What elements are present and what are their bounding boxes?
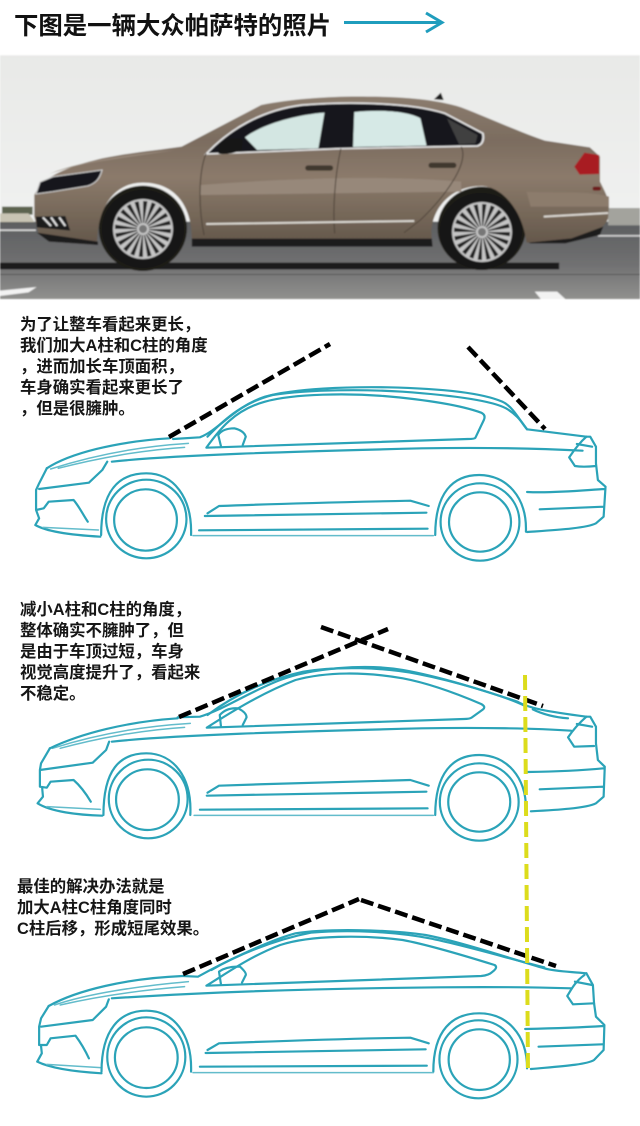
underbody — [37, 227, 603, 247]
car body — [34, 97, 609, 243]
window glass — [245, 113, 324, 150]
tail light — [574, 153, 599, 175]
door seams and handles — [200, 147, 463, 235]
road — [0, 222, 640, 299]
window frame — [206, 103, 483, 154]
chrome strips — [206, 213, 608, 224]
text block 3: 最佳的解决办法就是 加大A柱C柱角度同时 C柱后移，形成短尾效果。 — [17, 878, 209, 938]
antenna — [434, 93, 444, 100]
rear wheel — [440, 193, 522, 269]
yellow vertical guide line — [525, 675, 528, 1073]
car outline 1: long roof — [35, 387, 606, 561]
dashed guide lines for car 3 — [183, 899, 556, 974]
car outline 2: short roof — [38, 667, 605, 841]
dashed guide lines for car 2 — [179, 627, 543, 717]
car outline 3: fastback roof — [37, 930, 604, 1098]
front grille — [36, 216, 70, 231]
wheel wells — [99, 186, 187, 271]
arrow — [344, 12, 445, 34]
shoulder highlight — [49, 150, 461, 195]
text block 1: 为了让整车看起来更长， 我们加大A柱和C柱的角度 ，进而加长车顶面积， 车身确实看起来更长了 ，但是很臃肿。 — [20, 316, 208, 418]
headlight — [36, 170, 102, 194]
mirror — [218, 138, 243, 154]
front wheel — [102, 190, 184, 268]
title: 下图是一辆大众帕萨特的照片 — [14, 13, 331, 40]
text block 2: 减小A柱和C柱的角度， 整体确实不臃肿了，但 是由于车顶过短，车身 视觉高度提升了，看起来 不稳定。 — [20, 601, 200, 703]
sky — [0, 55, 640, 222]
dashed guide lines for car 1 — [169, 344, 545, 437]
